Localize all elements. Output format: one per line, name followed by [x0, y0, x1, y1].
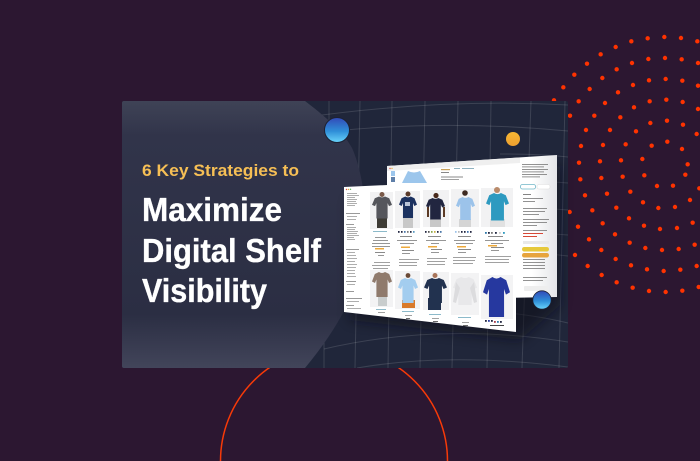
product: navy tee	[424, 273, 447, 310]
panel: title backing shape	[122, 101, 366, 368]
panel: dark navy card	[122, 101, 568, 368]
back product page screenshot	[387, 155, 557, 300]
product: light blue tee	[456, 190, 475, 227]
product: navy print tee	[399, 192, 417, 228]
product: white long sleeve	[453, 277, 477, 305]
screens shadow	[350, 165, 560, 340]
red dot pattern	[552, 35, 700, 294]
title: Maximize	[142, 191, 282, 228]
title	[142, 191, 322, 309]
product: brown tee	[372, 272, 392, 306]
red outlined circle	[220, 347, 448, 461]
product: teal tee	[486, 187, 509, 227]
front product grid screenshot	[344, 179, 516, 332]
product: grey tee	[372, 192, 392, 228]
warped grid lines	[300, 101, 568, 368]
title: Visibility	[142, 272, 268, 309]
orb: orange	[506, 132, 520, 146]
product: royal blue tee	[483, 277, 510, 317]
orb: blue lower	[533, 291, 551, 309]
product: light blue tee with shorts	[398, 273, 418, 308]
product: dark navy tee	[426, 193, 445, 227]
orb: blue top	[324, 118, 350, 142]
subtitle: 6 Key Strategies to	[142, 161, 299, 180]
title: Digital Shelf	[142, 232, 322, 269]
